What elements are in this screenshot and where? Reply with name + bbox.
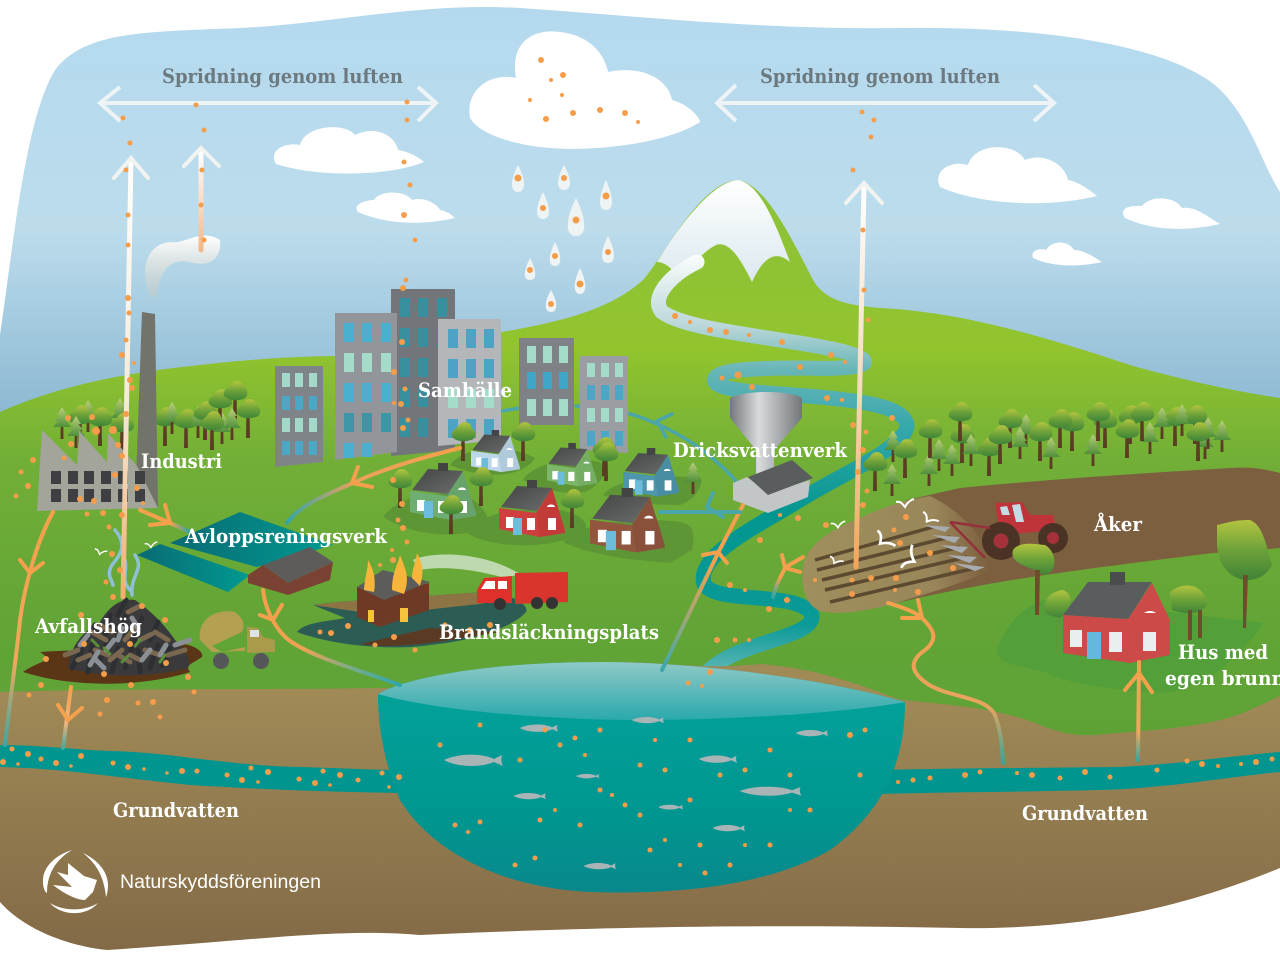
- heading: right air spread: Spridning genom luften: [760, 64, 1000, 88]
- label: Avloppsreningsverk: Avloppsreningsverk: [184, 525, 388, 548]
- label: Brandsläckningsplats: Brandsläckningsplats: [439, 621, 659, 644]
- logo: Naturskyddsföreningen: [43, 850, 321, 913]
- dump truck: [200, 611, 275, 669]
- factory: [37, 236, 220, 511]
- garden lawn: [997, 600, 1263, 693]
- wastewater plant: [137, 512, 333, 595]
- arrow: right air: [717, 85, 1054, 121]
- label: Industri: Industri: [141, 450, 222, 473]
- label: Hus med egen brunn: [1165, 641, 1280, 690]
- steam from waste heap: [109, 530, 138, 595]
- tractor and plough: [815, 502, 1068, 602]
- label: Åker: Åker: [1093, 512, 1143, 536]
- house lawns: [383, 448, 701, 563]
- burning house and fire engine: [297, 553, 568, 647]
- water treatment plant funnel and building: [730, 392, 813, 513]
- arrow: left air: [100, 87, 436, 121]
- forest: right: [864, 402, 1231, 496]
- label: Hus med egen brunn: Hus med: [1178, 641, 1268, 664]
- sky: [0, 7, 1280, 412]
- label: Avfallshög: Avfallshög: [34, 615, 142, 638]
- arrows: rising emissions: [114, 148, 882, 597]
- label: Grundvatten left: Grundvatten: [113, 799, 239, 822]
- lake: [378, 662, 905, 893]
- teal line behind city: [502, 406, 737, 482]
- label: Dricksvattenverk: Dricksvattenverk: [673, 439, 848, 462]
- brown field: [860, 468, 1280, 603]
- river: [658, 262, 907, 678]
- clouds: [274, 127, 1220, 265]
- rain drops: [512, 165, 614, 312]
- soil strip round lake: [620, 662, 900, 700]
- soil and lower ground: [0, 688, 1280, 960]
- houses: [389, 422, 702, 552]
- fish: [444, 717, 828, 869]
- waste heap: [23, 600, 202, 684]
- birds over field: [94, 499, 939, 572]
- private house with well: [1012, 520, 1272, 663]
- label: Samhälle: Samhälle: [418, 379, 512, 402]
- green land with mountain: [0, 180, 1280, 760]
- groundwater band: [0, 745, 1280, 794]
- heading: left air spread: Spridning genom luften: [162, 64, 403, 88]
- large rain cloud: [469, 31, 700, 149]
- snow cap: [657, 180, 790, 282]
- pathway arrows: [5, 448, 1152, 763]
- city buildings: [275, 289, 628, 467]
- label: Hus med egen brunn: egen brunn: [1165, 667, 1280, 690]
- logo: Naturskyddsföreningen: Naturskyddsföreningen: [120, 872, 321, 893]
- label: Grundvatten right: Grundvatten: [1022, 802, 1148, 825]
- ploughed field: [802, 496, 990, 613]
- forest: left: [53, 381, 260, 452]
